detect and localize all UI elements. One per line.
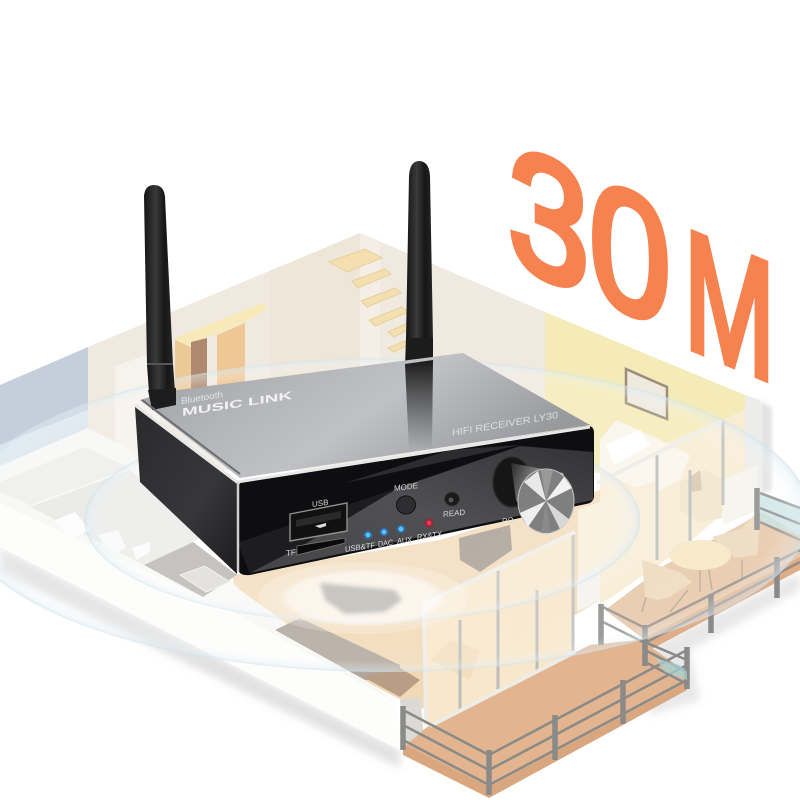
LED labels: USB&TF [345,541,375,554]
doors [175,340,191,400]
glass wall frames [460,420,723,710]
glass wall area [423,533,573,727]
middle wave [84,417,640,623]
TF slot [286,538,345,558]
stairs [329,249,414,352]
bed pillows [600,420,690,495]
read indicator [443,492,465,519]
front wall band [0,503,400,750]
left room furniture [55,512,90,540]
back walls [88,233,545,470]
status LEDs [364,518,434,540]
balcony railings [403,488,800,795]
TF slot: TF [286,548,296,558]
wall picture frame [626,369,667,419]
house floor plan [0,233,800,798]
read indicator: READ [443,508,465,519]
LED labels: RX&TX [417,529,443,542]
white side door frame [115,350,160,470]
yellow room wall [545,312,745,480]
front face [238,426,594,575]
outer shadows [0,547,400,768]
white wall section [723,465,757,525]
device [135,353,594,575]
outer wave [0,358,800,672]
antenna reflection [405,360,433,450]
upper balcony floor [605,512,800,640]
side cabinet [680,470,722,522]
LED labels: AUX [397,535,413,546]
left room base [0,428,400,750]
floor grid mat [180,566,230,592]
heading: 30M [508,107,775,419]
grey carpet [144,542,237,597]
low table [275,618,400,681]
round table and chairs [642,513,760,612]
reflection band [238,446,593,573]
top panel [140,353,590,478]
power label: PO [502,516,514,526]
white partition [577,565,600,612]
USB port [290,498,347,541]
LED labels: DAC [378,538,393,549]
left side face [135,407,237,574]
blue wall [0,347,88,445]
volume knob [493,457,574,533]
heading: 30M: 30 [508,107,671,366]
brand text: Bluetooth [181,389,223,406]
USB port: USB [312,498,328,509]
silver edges [135,405,590,482]
heading: 30M: M [684,192,775,419]
LED labels [345,529,443,554]
device: MUSIC LINK [182,390,292,419]
doorway ledge [175,303,268,350]
wood floor [233,490,600,710]
lower balcony floor [403,640,687,790]
device: HIFI RECEIVER LY30 [452,410,558,439]
left room floor [30,470,200,565]
tv stand [459,525,512,572]
antenna: left [144,185,176,405]
inner wave [258,562,468,634]
sound waves [0,358,800,672]
mode button: MODE [394,481,418,493]
antenna: right [405,161,433,367]
mode button [394,481,418,514]
sofa [578,480,657,598]
